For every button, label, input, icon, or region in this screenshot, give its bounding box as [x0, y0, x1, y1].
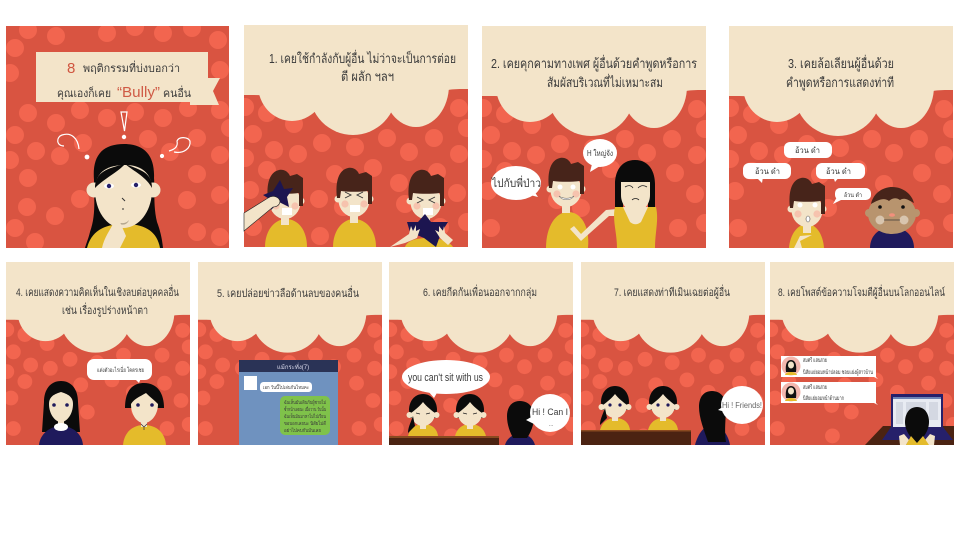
character: girl right	[646, 386, 680, 430]
panel: 3 teasing	[721, 26, 960, 248]
icon: question mark left	[58, 134, 89, 159]
social post 2: นิสัยแย่ยอมหน้าด้านมาก	[803, 395, 844, 402]
heading	[269, 49, 456, 84]
chat bubble: green: ฉันเห็นมันมาหาไม่ไปเรียน	[284, 412, 326, 420]
banner: “Bully”	[117, 84, 160, 101]
speech bubble: left: อ้วน ดำ	[755, 167, 780, 176]
chat bubble: green: ฉันเห็นมันเดินกับผู้ชายไม่	[284, 398, 326, 406]
social post 1: นิสัยแย่ยอมหน้าปลอม ชอบแย่งผู้สาวบ้าน	[803, 369, 873, 376]
heading: 5. เคยปล่อยข่าวลือด้านลบของคนอื่น	[217, 285, 359, 300]
banner heading: 8	[67, 60, 75, 77]
speech bubble: small: H ใหญ่จัง	[587, 149, 613, 158]
heading: 2. เคยคุกคามทางเพศ ผู้อื่นด้วยคำพูดหรือการ	[491, 55, 697, 72]
speech bubble	[526, 394, 570, 432]
speech bubble	[87, 359, 152, 383]
character: teased boy	[865, 187, 920, 248]
character: teasing boy	[788, 178, 826, 248]
heading: ตี ผลัก ฯลฯ	[341, 69, 394, 84]
speech bubble: top: อ้วน ดำ	[795, 146, 820, 155]
speech bubble	[402, 360, 490, 398]
social post 2	[781, 382, 878, 405]
chat window: แม้กระทั่ง(7)	[277, 363, 309, 371]
character: girl at laptop	[899, 407, 935, 445]
heading: เช่น เรื่องรูปร่างหน้าตา	[62, 302, 148, 317]
banner: พฤติกรรมที่บ่งบอกว่า	[83, 60, 180, 75]
character: girl left	[598, 386, 632, 430]
heading: 7. เคยแสดงท่าทีเมินเฉยต่อผู้อื่น	[614, 284, 730, 299]
character: girl left	[406, 394, 440, 436]
heading: คำพูดหรือการแสดงท่าที	[786, 75, 894, 91]
speech bubble: แต่งตัวอะไรเนี่ย โคตรเชย	[97, 366, 144, 374]
speech bubble: large: ไปกับพี่ป่าว	[491, 175, 541, 190]
speech bubble: ...	[549, 422, 553, 428]
speech bubble: Hi ! Can I	[532, 407, 568, 417]
heading: 3. เคยล้อเลียนผู้อื่นด้วย	[788, 55, 894, 72]
speech bubble: Hi ! Friends!	[722, 400, 762, 410]
character: boy punched in chest	[390, 170, 453, 247]
panel: 2 sexual harassment	[474, 26, 714, 248]
banner	[36, 52, 220, 105]
panel: 5 spreading rumors	[191, 262, 389, 445]
speech bubble: small	[833, 188, 871, 204]
panel: 8 online attacks	[763, 262, 960, 445]
speech bubble: you can't sit with us	[408, 372, 483, 384]
character: ignored girl from behind	[695, 391, 730, 445]
chat bubble: green: ขอบอกเลยนะ นิสัยไม่ดี	[284, 420, 326, 427]
character: boy in pain	[333, 168, 376, 247]
heading: 6. เคยกีดกันเพื่อนออกจากกลุ่ม	[423, 284, 537, 299]
panel: 7 ignoring	[574, 262, 772, 445]
chat window: เอก วันนี้ไปเล่นกันไหมคะ	[263, 382, 309, 391]
character: harassed girl	[614, 160, 657, 248]
speech bubble: left	[743, 163, 791, 183]
character: thinking girl	[85, 144, 163, 248]
social post 2: สมศรี แสนสวย	[803, 383, 827, 391]
heading: 1. เคยใช้กำลังกับผู้อื่น ไม่ว่าจะเป็นการต่อย	[269, 49, 456, 67]
chat bubble: green	[280, 396, 330, 435]
heading	[491, 55, 697, 90]
character: long hair girl	[39, 381, 83, 445]
speech bubble: small: อ้วน ดำ	[844, 192, 862, 199]
character: girl right	[454, 394, 486, 436]
social post 1	[781, 356, 878, 379]
banner: คุณเองก็เคย	[57, 86, 111, 100]
table	[581, 430, 691, 445]
table	[389, 436, 499, 445]
heading: สัมผัสบริเวณที่ไม่เหมาะสม	[547, 74, 663, 90]
character: excluded girl from behind	[505, 401, 535, 445]
speech bubble: large	[491, 166, 541, 200]
icon: question mark right	[160, 138, 190, 158]
character: bob hair girl	[123, 383, 166, 445]
speech bubble	[718, 386, 763, 424]
chat window	[239, 360, 338, 445]
icon: exclamation mark	[121, 112, 127, 139]
panel: 1 physical force	[236, 25, 476, 247]
speech bubble: right	[816, 163, 865, 182]
social post 1: สมศรี แสนสวย	[803, 356, 827, 364]
heading: 4. เคยแสดงความคิดเห็นในเชิงลบต่อบุคคลอื่น	[16, 284, 179, 299]
speech bubble: small	[583, 139, 617, 172]
speech bubble: right: อ้วน ดำ	[826, 167, 851, 176]
speech bubble: top	[784, 142, 832, 158]
heading	[16, 284, 179, 317]
table and laptop	[865, 394, 954, 445]
character: harassing boy	[546, 158, 617, 248]
chat bubble: green: ซ้ำหน้าเลยนะ เมื่อวาน วันนั้น	[284, 404, 326, 413]
banner: คนอื่น	[163, 85, 191, 100]
chat bubble: green: อย่าไปคบกับมันเลย	[284, 427, 321, 434]
heading	[786, 55, 894, 91]
panel: 4 negative comments	[0, 262, 197, 445]
panel: 6 exclusion	[382, 262, 580, 445]
panel: intro	[6, 26, 229, 248]
character: boy punched	[244, 170, 307, 247]
